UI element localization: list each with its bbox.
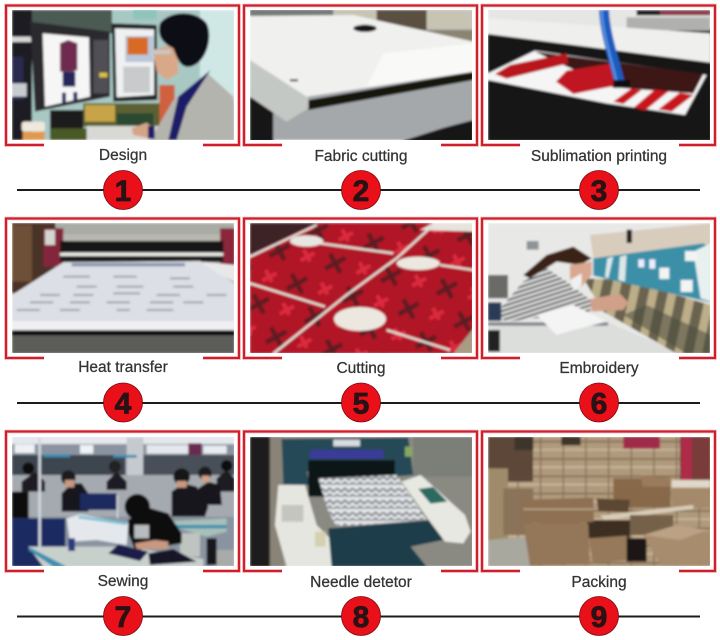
- red corner frame: [244, 218, 477, 358]
- panel: step 1 Design: [6, 6, 239, 164]
- label: Embroidery: [559, 360, 639, 377]
- red corner frame: [6, 218, 239, 358]
- label: Sublimation printing: [531, 148, 667, 165]
- number badge 7: [104, 596, 142, 636]
- label: Sewing: [98, 573, 148, 590]
- panel: step 2 Fabric cutting: [244, 6, 477, 165]
- red corner frame: [244, 432, 477, 571]
- number badge 9: [580, 596, 618, 636]
- photo: embroidery machine: [488, 223, 711, 354]
- photo: designer at monitors: [12, 9, 235, 141]
- red corner frame: [482, 6, 715, 145]
- number badge 4: 4: [115, 388, 132, 420]
- timeline: steps 4 to 6: [17, 383, 700, 422]
- number badge 2: [342, 170, 380, 210]
- photo: needle detector: [250, 437, 473, 567]
- timeline: steps 1 to 3: [17, 170, 700, 210]
- number badge 3: [580, 170, 618, 210]
- number badge 5: 5: [353, 388, 369, 420]
- red corner frame: [6, 432, 239, 571]
- label: Cutting: [336, 360, 386, 377]
- number badge 6: [580, 383, 618, 422]
- number badge 9: 9: [591, 601, 607, 634]
- photo: stacked cartons: [488, 437, 711, 567]
- number badge 2: 2: [353, 175, 369, 208]
- red corner frame: [482, 218, 715, 358]
- label: Fabric cutting: [314, 148, 408, 165]
- red corner frame: [482, 432, 715, 571]
- timeline: steps 7 to 9: [17, 596, 700, 636]
- panel: step 8 Needle detetor: [244, 432, 477, 591]
- number badge 8: 8: [353, 601, 369, 634]
- label: Needle detetor: [310, 574, 412, 591]
- panel: step 4 Heat transfer: [6, 218, 239, 376]
- number badge 5: [342, 383, 380, 422]
- number badge 1: 1: [115, 175, 131, 208]
- photo: heat press: [12, 223, 235, 354]
- panel: step 3 Sublimation printing: [482, 6, 715, 165]
- photo: cutting table: [250, 9, 473, 142]
- photo: cut red fabric: [250, 223, 473, 354]
- red corner frame: [244, 6, 477, 145]
- red corner frame: [6, 6, 239, 145]
- photo: sublimation printer: [488, 9, 711, 141]
- number badge 6: 6: [591, 388, 607, 420]
- panel: step 5 Cutting: [244, 218, 477, 377]
- number badge 4: [104, 383, 142, 422]
- panel: step 6 Embroidery: [482, 218, 715, 377]
- panel: step 7 Sewing: [6, 432, 239, 590]
- number badge 8: [342, 596, 380, 636]
- number badge 1: [104, 170, 142, 210]
- number badge 3: 3: [591, 175, 607, 208]
- label: Packing: [571, 574, 627, 591]
- label: Design: [99, 147, 147, 164]
- panel: step 9 Packing: [482, 432, 715, 591]
- photo: sewing workshop: [12, 437, 235, 567]
- label: Heat transfer: [78, 359, 168, 376]
- number badge 7: 7: [115, 601, 131, 634]
